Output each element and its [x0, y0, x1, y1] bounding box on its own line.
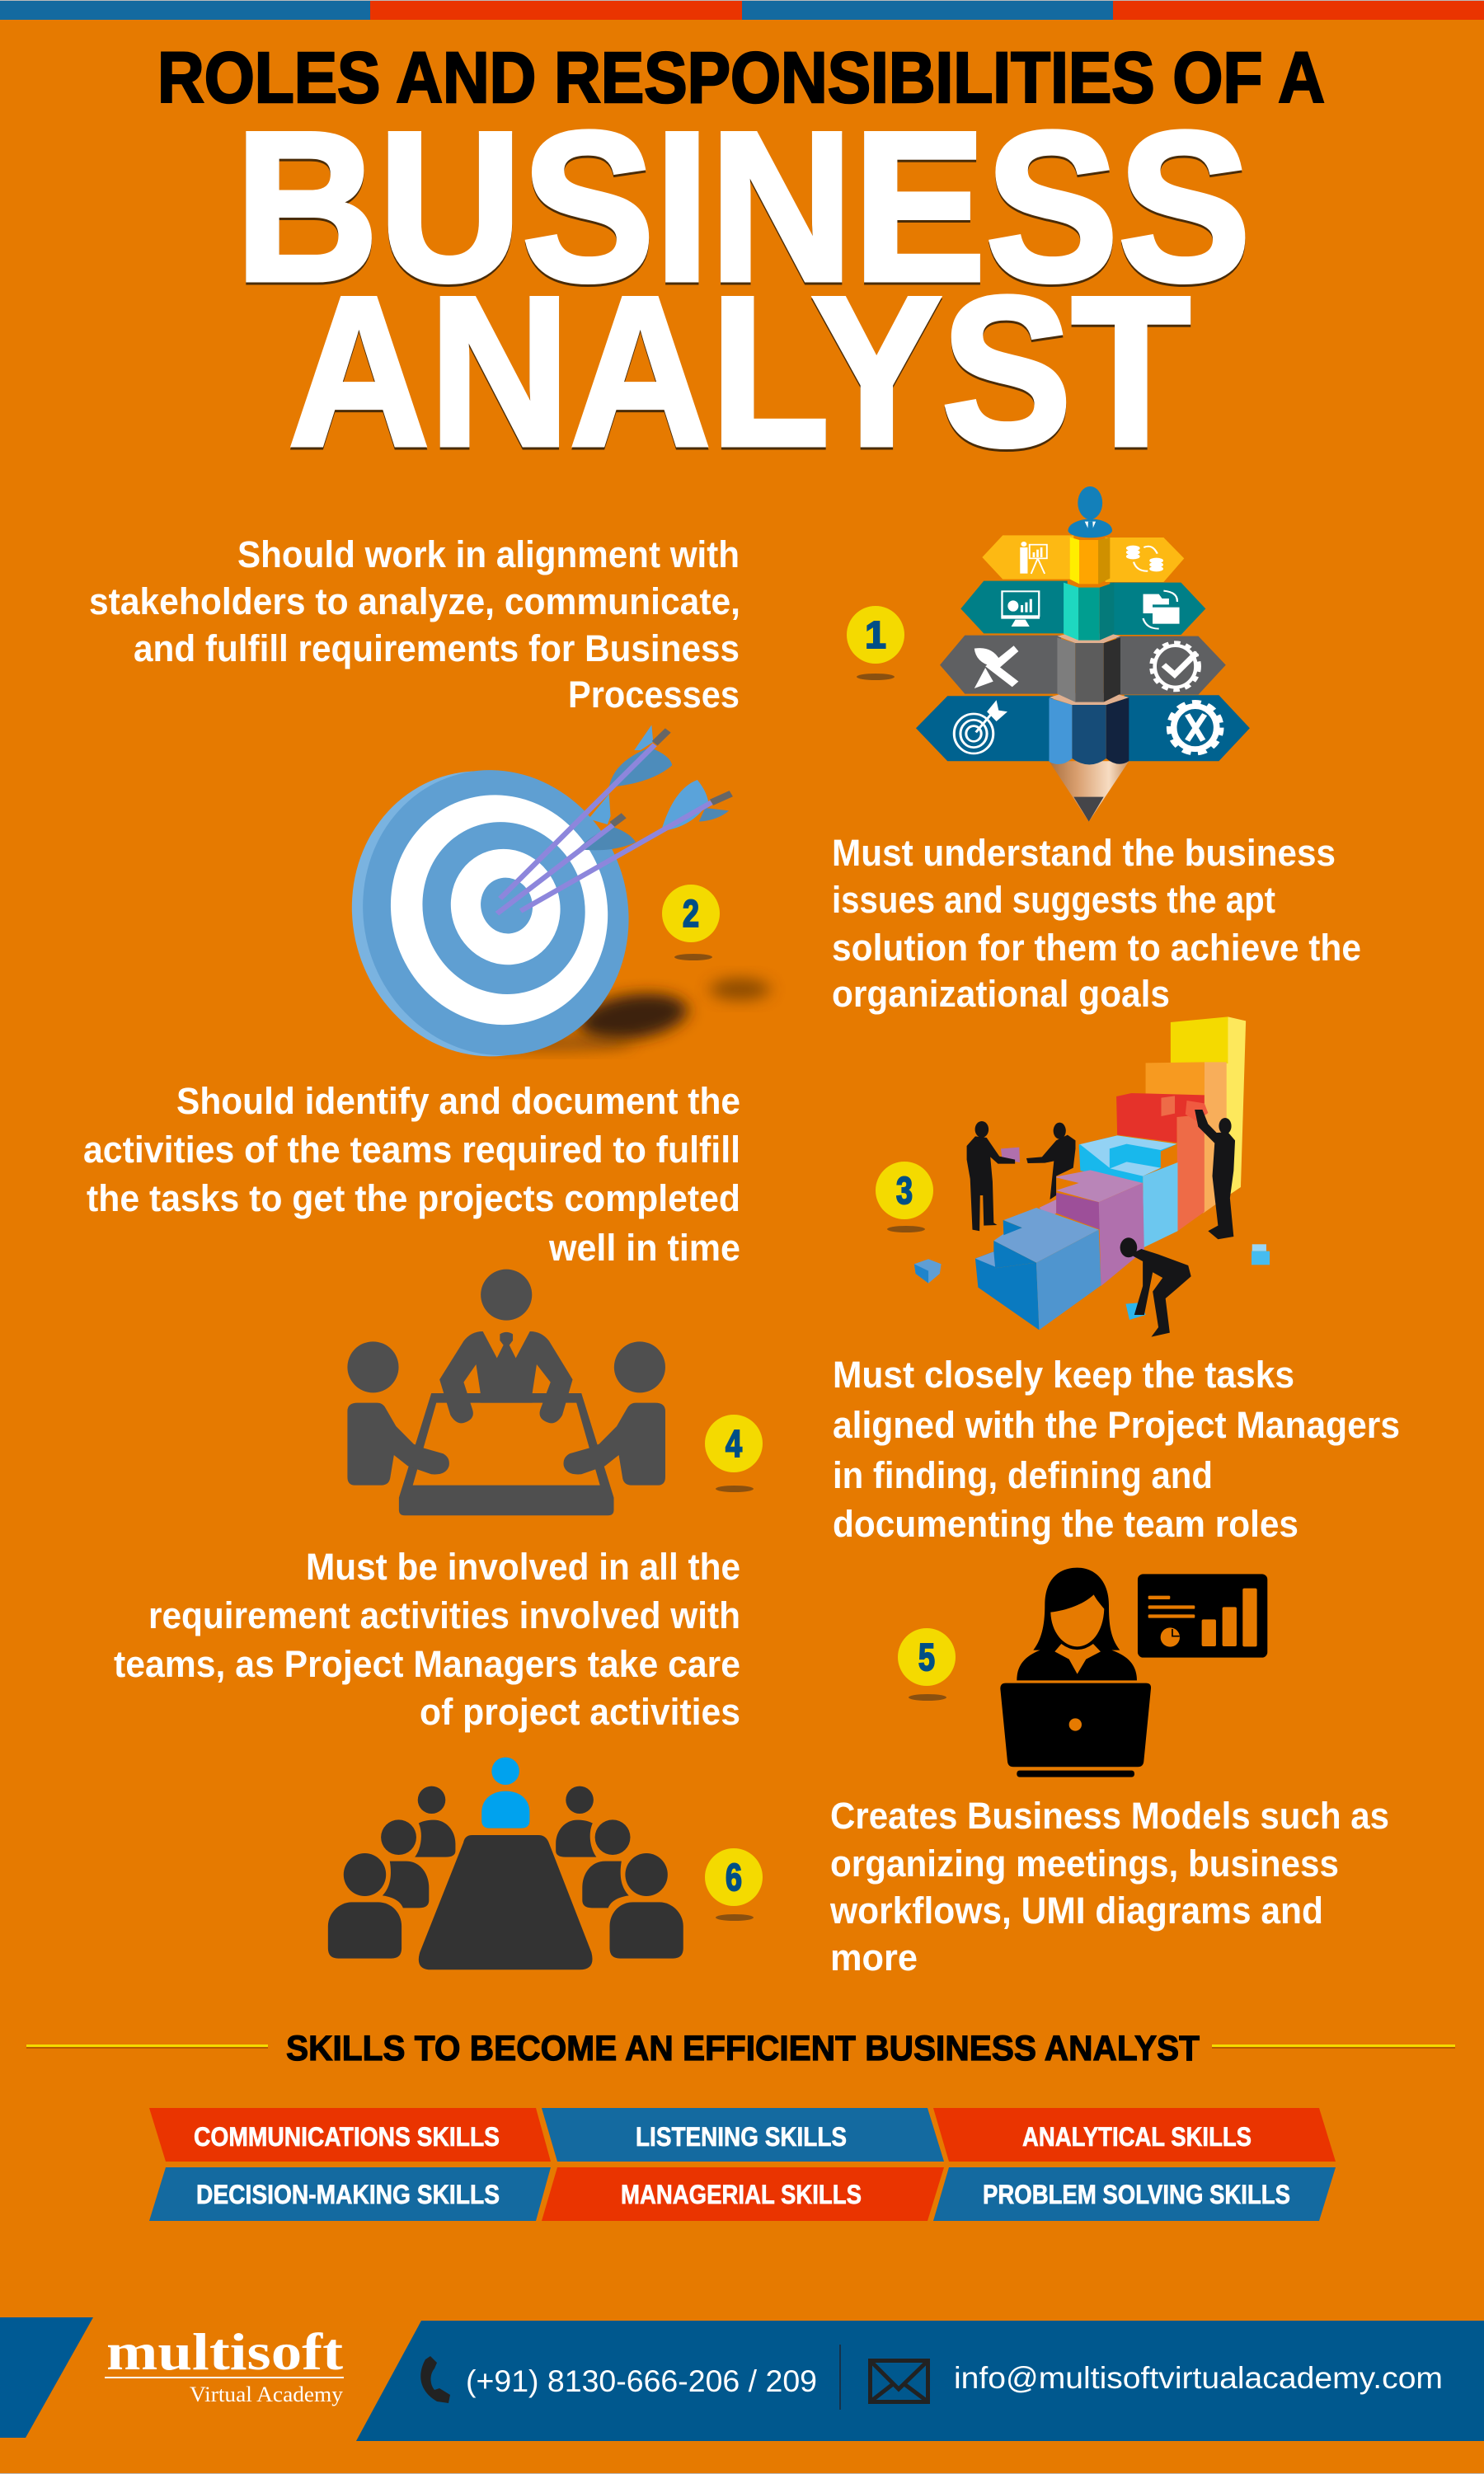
skill tag: problem solving: PROBLEM SOLVING SKILLS: [983, 2180, 1290, 2209]
text block 2: [832, 832, 1361, 1015]
text block 4: documenting the team roles: [833, 1503, 1298, 1545]
text block 4: in finding, defining and: [833, 1454, 1213, 1496]
icon: meeting table with three people: [347, 1270, 665, 1515]
text block 6: more: [830, 1936, 918, 1979]
skill tag: decision-making: DECISION-MAKING SKILLS: [196, 2180, 500, 2209]
badge 5: [898, 1628, 956, 1701]
skill tag: decision-making: [149, 2167, 551, 2221]
text block 3: well in time: [548, 1227, 740, 1269]
skill tag: managerial: MANAGERIAL SKILLS: [621, 2180, 862, 2209]
small cubes: [914, 1259, 942, 1284]
footer: [0, 2317, 1484, 2441]
text block 4: Must closely keep the tasks: [833, 1354, 1294, 1396]
text block 3: [83, 1080, 740, 1269]
footer main band: [356, 2321, 1484, 2441]
text block 5: of project activities: [420, 1691, 740, 1733]
skill tag: analytical: [933, 2108, 1336, 2162]
skill tag: communications: COMMUNICATIONS SKILLS: [194, 2122, 500, 2152]
yellow section: [1070, 538, 1079, 584]
icon: envelope: [871, 2361, 928, 2402]
text block 6: Creates Business Models such as: [830, 1795, 1389, 1837]
badge 1: [847, 606, 904, 680]
badge 2: 2: [683, 892, 699, 935]
skill tag: managerial: [542, 2167, 944, 2221]
text block 4: [833, 1354, 1400, 1545]
icon: building blocks with silhouettes: [914, 1016, 1270, 1337]
logo: [105, 2322, 344, 2406]
skill tag: listening: LISTENING SKILLS: [636, 2122, 847, 2152]
text block 6: workflows, UMI diagrams and: [829, 1890, 1323, 1932]
small white icons: [954, 542, 1221, 753]
title word: business: BUSINESS: [235, 87, 1251, 325]
text block 1: and fulfill requirements for Business: [134, 627, 740, 669]
silhouettes: [967, 1110, 1235, 1337]
badge 3: [876, 1162, 933, 1232]
email address: info@multisoftvirtualacademy.com: [954, 2361, 1443, 2395]
logo: multisoft: [106, 2322, 344, 2381]
text block 5: Must be involved in all the: [306, 1546, 740, 1588]
badge 5: 5: [918, 1636, 935, 1678]
pencil wood: [1049, 761, 1129, 822]
skills heading with rules: [26, 2029, 1455, 2068]
title line: roles and responsibilities: ROLES AND RESPONSIBILITIES OF A: [157, 38, 1325, 118]
text block 3: activities of the teams required to fulfill: [83, 1129, 740, 1171]
text block 5: teams, as Project Managers take care: [114, 1643, 740, 1685]
icon: pencil with arrows: [916, 486, 1250, 822]
skills heading with rules: SKILLS TO BECOME AN EFFICIENT BUSINESS ANALYST: [286, 2029, 1200, 2068]
text block 6: [829, 1795, 1389, 1979]
text block 3: the tasks to get the projects completed: [87, 1177, 740, 1219]
text block 2: organizational goals: [832, 973, 1170, 1015]
text block 2: Must understand the business: [832, 832, 1336, 874]
skill tag: communications: [149, 2108, 551, 2162]
icon: boardroom team: [328, 1758, 683, 1969]
badge 1: 1: [865, 613, 886, 656]
icon: woman at laptop with dashboard: [1000, 1568, 1267, 1777]
text block 1: Processes: [568, 674, 740, 716]
arrow shafts: [500, 744, 655, 899]
badge 6: [705, 1848, 763, 1921]
blue section: [1049, 698, 1072, 764]
logo: Virtual Academy: [190, 2382, 343, 2406]
text block 5: requirement activities involved with: [148, 1594, 740, 1636]
text block 1: [89, 533, 740, 716]
text block 2: issues and suggests the apt: [832, 879, 1275, 921]
icon: phone: [420, 2356, 450, 2403]
badge 2: [662, 885, 720, 960]
teal section: [1064, 583, 1078, 641]
text block 1: stakeholders to analyze, communicate,: [89, 580, 740, 622]
text block 2: solution for them to achieve the: [832, 927, 1361, 969]
title word: analyst: ANALYST: [289, 252, 1190, 490]
top colour bar: [0, 1, 1484, 20]
text block 5: [114, 1546, 740, 1733]
badge 4: [705, 1415, 763, 1492]
icon: target with arrows: [336, 725, 770, 1068]
skill tag: problem solving: [933, 2167, 1336, 2221]
footer left band: [0, 2317, 93, 2438]
skill tag: listening: [542, 2108, 944, 2162]
text block 4: aligned with the Project Managers: [833, 1404, 1400, 1446]
text block 3: Should identify and document the: [176, 1080, 740, 1122]
title: [157, 38, 1325, 490]
skill tag: analytical: ANALYTICAL SKILLS: [1022, 2122, 1252, 2152]
text block 6: organizing meetings, business: [830, 1843, 1339, 1885]
badge 3: 3: [896, 1169, 913, 1212]
arrow fletchings: [589, 794, 611, 824]
gray section: [1057, 637, 1075, 702]
phone number: (+91) 8130-666-206 / 209: [466, 2364, 817, 2398]
badge 6: 6: [726, 1856, 742, 1899]
badge 4: 4: [726, 1422, 742, 1465]
text block 1: Should work in alignment with: [237, 533, 740, 575]
person on top: [1078, 486, 1102, 519]
